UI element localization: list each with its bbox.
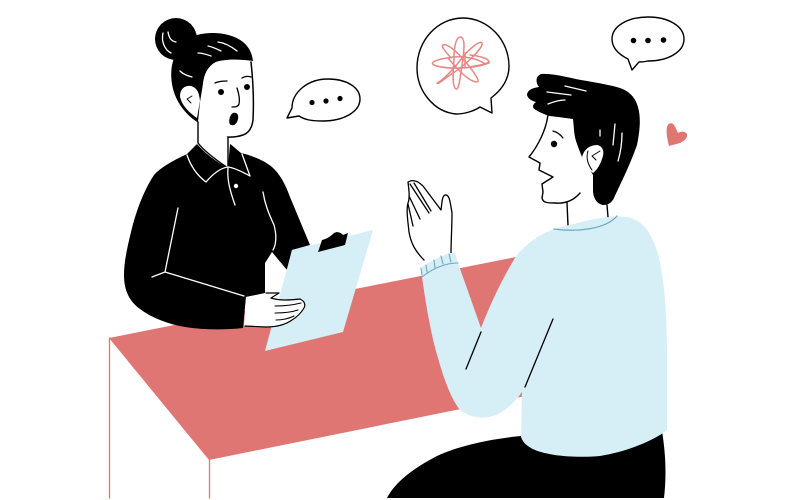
- man: hair: [527, 74, 640, 205]
- desk: [109, 257, 535, 498]
- clipboard: [265, 230, 373, 351]
- woman: [124, 18, 310, 329]
- thought bubble with scribble: [417, 18, 509, 114]
- scribble: [433, 37, 489, 89]
- man: raised hand: [407, 181, 452, 264]
- woman: hand on clipboard: [244, 293, 305, 327]
- speech bubble: man: [612, 17, 684, 70]
- woman: hair and bun: [155, 18, 253, 123]
- icon: heart: [667, 123, 687, 146]
- woman: face and neck: [180, 60, 253, 168]
- speech bubble: woman: [287, 79, 360, 121]
- man: ear: [582, 145, 603, 173]
- man: sweater: [421, 216, 667, 457]
- woman: black shirt: [124, 144, 310, 329]
- man: face and neck: [529, 115, 608, 240]
- man: [387, 74, 667, 498]
- man: trousers: [387, 431, 665, 498]
